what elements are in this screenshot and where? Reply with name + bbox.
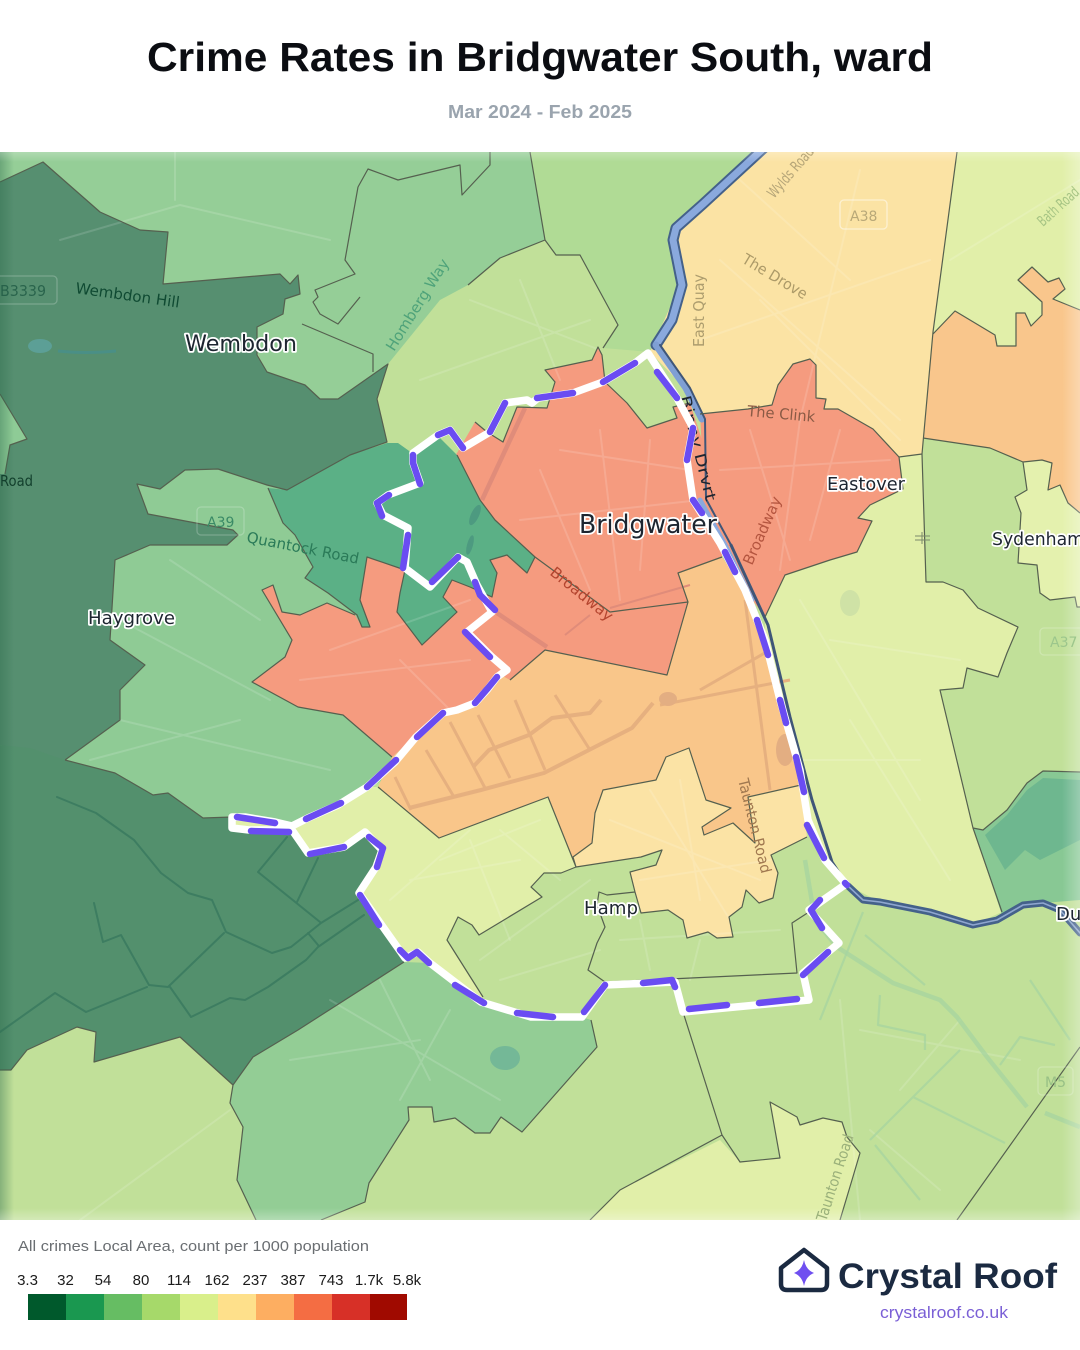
place name labels: Eastover [827,474,906,495]
area: south yellow green [232,787,576,1002]
area: Wembdon dark green [0,162,388,760]
area: central Bridgwater salmon [252,347,722,757]
place name labels: Bridgwater [579,510,717,540]
logo: Crystal Roof [781,1250,1057,1322]
legend colour ramp [28,1294,407,1320]
ward boundary: Bridgwater South [232,353,847,1017]
river crossing marker [915,532,930,544]
area: east teal patch [985,778,1080,870]
road name labels: Binny Drvrt [676,394,720,503]
motorway and lanes east [805,860,1080,1200]
base light green area [0,152,1080,1220]
streams and field drains [0,797,364,1032]
area: Sydenham pale [1015,460,1080,607]
railway band through salmon [482,408,690,647]
road name labels: Wembdon Hill [74,279,181,312]
street texture [60,152,1080,1220]
area: east yellow green [765,454,1018,925]
road name labels: M5 [1045,1075,1066,1091]
area: south peach [573,748,807,938]
legend scale labels: 32 [57,1272,74,1289]
legend scale labels: 3.3 [17,1272,38,1289]
area: Haygrove medium green [64,470,400,822]
wordmark: Crystal Roof [838,1257,1057,1296]
soft map edge shading [0,152,1080,1220]
river [656,146,1080,933]
road name labels: Taunton Road [812,1132,858,1224]
legend scale labels: 1.7k [355,1272,384,1289]
road name labels: The Clink [746,402,816,426]
legend scale labels: 80 [133,1272,149,1289]
road name labels: B3339 [0,282,46,300]
area: south-west dark green [0,745,404,1085]
icon: house with sparkle [781,1250,827,1290]
road name labels: East Quay [690,274,708,347]
area: Eastover salmon [700,359,903,617]
road name labels: A37 [1050,635,1077,651]
legend scale labels [17,1272,422,1289]
orange area building patches [659,692,794,766]
legend caption: All crimes Local Area, count per 1000 population [18,1238,369,1255]
road name labels: A38 [850,209,877,225]
legend scale labels: 387 [280,1272,306,1289]
road name labels: Road [0,472,33,490]
area: east orange [923,267,1080,513]
area: south-east pale [590,1102,860,1220]
area: east teal green [973,771,1080,915]
legend [17,1238,422,1320]
road name labels: Taunton Road [734,776,775,875]
website: crystalroof.co.uk [880,1304,1009,1322]
road name labels: Broadway [546,563,617,625]
area: north centre light green [530,152,760,352]
road name labels: Quantock Road [245,528,361,568]
area: north-east peach [650,152,957,457]
legend scale labels: 237 [242,1272,268,1289]
road name labels: The Drove [738,250,811,303]
title: Crime Rates in Bridgwater South, ward [147,34,933,80]
legend scale labels: 54 [95,1272,111,1289]
legend scale labels: 743 [318,1272,344,1289]
legend scale labels: 114 [167,1272,191,1289]
legend scale labels: 162 [204,1272,230,1289]
place name labels: Wembdon [185,332,297,357]
lakes and pools [28,339,860,1070]
area boundary lines [0,152,1080,1220]
area: top-right yellow green [933,152,1080,346]
road name labels: Broadway [739,494,785,568]
area: north-west medium green [0,152,545,399]
legend scale labels: 5.8k [393,1272,422,1289]
road name labels: Homberg Way [382,255,453,354]
orange area road grid [395,600,790,810]
place name labels [88,332,1080,925]
area: south medium green [230,962,597,1220]
road name labels: A39 [207,515,234,531]
place name labels: Haygrove [88,608,175,629]
road shields [0,200,1080,1095]
area: Quantock Road mid green [268,438,535,645]
place name labels: Hamp [584,898,638,919]
road name labels: Wylds Road [763,143,818,202]
area: western notch [0,394,27,474]
subtitle: date range: Mar 2024 - Feb 2025 [448,101,632,122]
area: south orange [378,557,801,867]
